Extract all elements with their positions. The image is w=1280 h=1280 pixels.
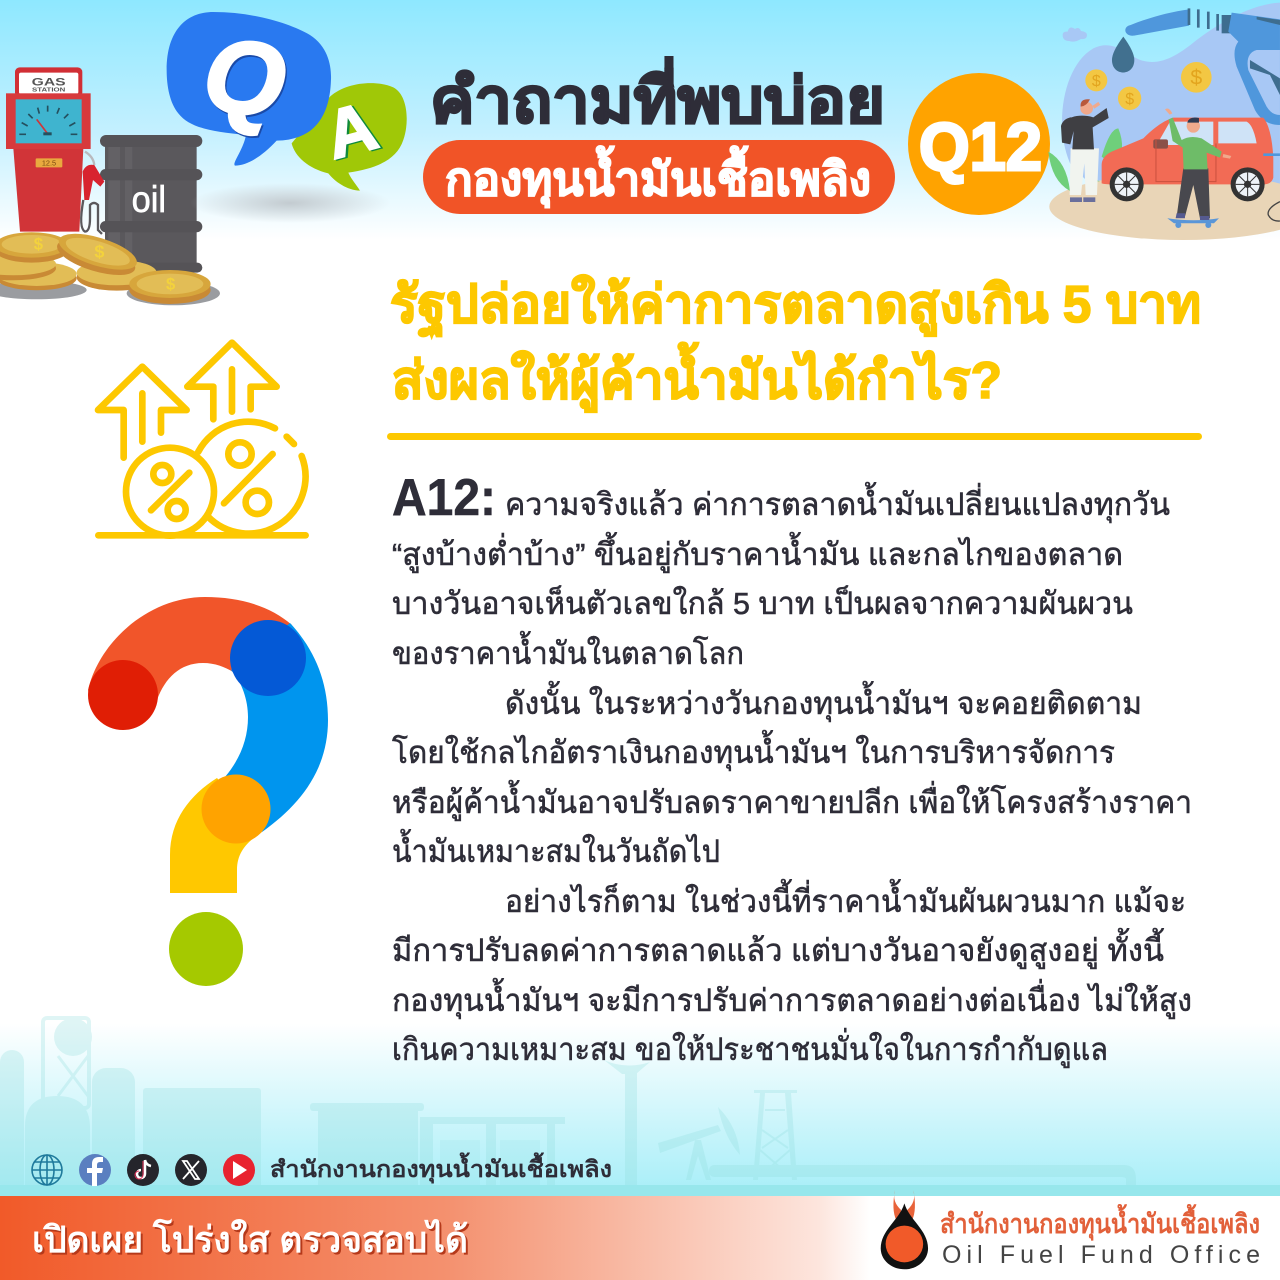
speech bubble A: A xyxy=(320,88,387,175)
gold coins: $ xyxy=(166,274,176,293)
icon: facebook xyxy=(79,1154,111,1186)
answer text: ของราคาน้ำมันในตลาดโลก xyxy=(392,631,744,671)
question heading: ส่งผลให้ผู้ค้าน้ำมันได้กำไร? xyxy=(392,342,1002,413)
question heading: รัฐปล่อยให้ค่าการตลาดสูงเกิน 5 บาท xyxy=(390,274,1201,338)
gas pump illustration xyxy=(6,67,102,234)
gas pump illustration: GAS xyxy=(32,76,66,88)
gas pump illustration: STATION xyxy=(32,87,65,93)
title: คำถามที่พบบ่อย xyxy=(430,57,885,136)
icon: tiktok xyxy=(127,1154,159,1186)
answer text: เกินความเหมาะสม ขอให้ประชาชนมั่นใจในการกำกับดูแล xyxy=(392,1028,1108,1068)
speech bubble A xyxy=(292,83,407,191)
logo text English: Oil Fuel Fund Office xyxy=(942,1241,1260,1269)
gas pump illustration: 12.5 xyxy=(42,159,56,168)
car and people illustration: $ xyxy=(1092,73,1101,90)
logo: oil drop and flame xyxy=(881,1190,928,1269)
gold coins: $ xyxy=(34,234,44,253)
answer text: น้ำมันเหมาะสมในวันถัดไป xyxy=(392,829,720,869)
gold coins xyxy=(0,226,220,305)
industrial skyline silhouette xyxy=(0,1018,1136,1196)
answer text: หรือผู้ค้าน้ำมันอาจปรับลดราคาขายปลีก เพื่อให้โครงสร้างราคา xyxy=(392,780,1192,821)
footer slogan: เปิดเผย โปร่งใส ตรวจสอบได้ xyxy=(32,1218,468,1260)
footer slogan: เปิดเผย โปร่งใส ตรวจสอบได้ xyxy=(34,1220,470,1262)
oil barrel xyxy=(100,135,202,273)
icon: percent coins with rising arrows xyxy=(98,343,306,536)
answer text: “สูงบ้างต่ำบ้าง” ขึ้นอยู่กับราคาน้ำมัน และกลไกของตลาด xyxy=(392,532,1123,573)
subtitle pill: กองทุนน้ำมันเชื้อเพลิง xyxy=(445,145,871,208)
subtitle pill xyxy=(423,140,895,214)
gold coins: $ xyxy=(94,241,104,261)
icon: X xyxy=(175,1154,207,1186)
answer text xyxy=(392,469,1192,1068)
bottom teal strip xyxy=(0,1185,1280,1196)
footer band xyxy=(0,1196,1280,1280)
fuel nozzle red xyxy=(83,165,104,200)
heading rule xyxy=(387,433,1202,440)
background bottom gradient xyxy=(0,1000,1280,1196)
Q12 badge: Q12 xyxy=(919,109,1042,185)
car and people illustration: $ xyxy=(1190,66,1202,90)
answer text: โดยใช้กลไกอัตราเงินกองทุนน้ำมันฯ ในการบริหารจัดการ xyxy=(392,730,1115,772)
icon: youtube xyxy=(223,1154,255,1186)
answer text: A12: xyxy=(392,469,496,527)
car and people illustration xyxy=(1048,3,1280,240)
question heading xyxy=(390,274,1201,413)
skateboarder xyxy=(1165,109,1231,228)
speech bubble A: A xyxy=(318,88,385,174)
answer text: อย่างไรก็ตาม ในช่วงนี้ที่ราคาน้ำมันผันผวนมาก แม้จะ xyxy=(505,879,1186,919)
shadow under speech bubbles xyxy=(190,183,390,223)
background top gradient xyxy=(0,0,1280,240)
answer text: ดังนั้น ในระหว่างวันกองทุนน้ำมันฯ จะคอยติดตาม xyxy=(505,681,1142,723)
car and people illustration: $ xyxy=(1125,91,1134,108)
answer text: บางวันอาจเห็นตัวเลขใกล้ 5 บาท เป็นผลจากความผันผวน xyxy=(392,585,1133,621)
oil barrel: oil xyxy=(132,178,166,220)
speech bubble Q xyxy=(167,12,331,166)
icon: colourful question mark xyxy=(88,597,328,986)
man thinking xyxy=(1061,99,1109,202)
answer text: กองทุนน้ำมันฯ จะมีการปรับค่าการตลาดอย่างต่อเนื่อง ไม่ให้สูง xyxy=(392,978,1192,1020)
speech bubble Q: Q xyxy=(197,14,293,140)
answer text: มีการปรับลดค่าการตลาดแล้ว แต่บางวันอาจยังดูสูงอยู่ ทั้งนี้ xyxy=(392,928,1164,969)
speech bubble Q: Q xyxy=(198,16,294,142)
Q12 badge xyxy=(908,73,1050,215)
social handle: สำนักงานกองทุนน้ำมันเชื้อเพลิง xyxy=(270,1152,612,1184)
icon: website globe xyxy=(32,1155,62,1185)
answer text: ความจริงแล้ว ค่าการตลาดน้ำมันเปลี่ยนแปลงทุกวัน xyxy=(505,482,1170,524)
